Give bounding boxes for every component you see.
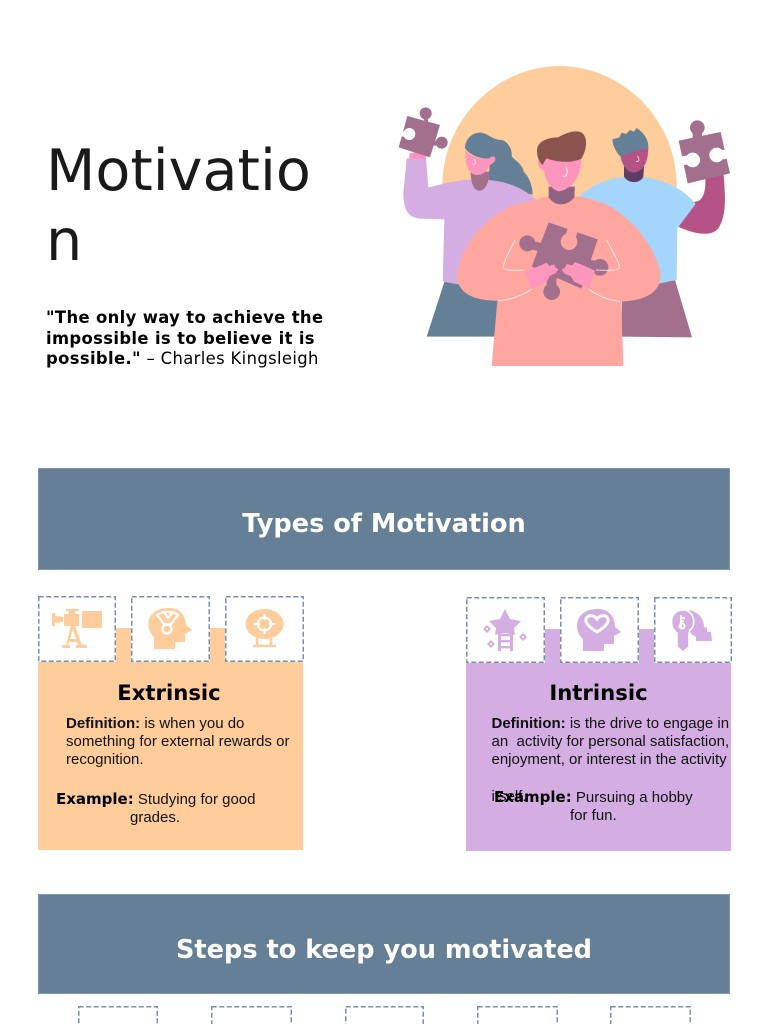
illustration: three people holding puzzle pieces xyxy=(398,66,730,366)
sleeve creases xyxy=(498,240,620,301)
intrinsic definition: enjoyment, or interest in the activity xyxy=(492,751,727,768)
intrinsic definition overflow: itself. xyxy=(492,788,527,805)
extrinsic example xyxy=(56,790,256,826)
extrinsic example: Example: Studying for good xyxy=(56,790,256,808)
quote: "The only way to achieve the xyxy=(46,308,323,327)
extrinsic definition xyxy=(66,715,290,768)
intrinsic example: Example: Pursuing a hobby xyxy=(494,788,693,806)
heading band: steps xyxy=(38,894,730,994)
icon box: camera on tripod xyxy=(38,596,116,662)
heading band: types of motivation: Types of Motivation xyxy=(242,509,526,539)
centre person xyxy=(457,131,661,366)
sun arch xyxy=(442,66,677,207)
icon box: head with medal xyxy=(131,596,210,662)
title: n xyxy=(46,208,82,274)
quote: impossible is to believe it is xyxy=(46,329,315,348)
step box 1 xyxy=(78,1006,158,1024)
extrinsic heading: Extrinsic xyxy=(117,680,221,705)
extrinsic example: grades. xyxy=(130,809,180,826)
icon box: star on ladder xyxy=(466,597,545,663)
quote: possible." – Charles Kingsleigh xyxy=(46,349,319,368)
step box 2 xyxy=(211,1006,292,1024)
heading band: steps: Steps to keep you motivated xyxy=(176,935,592,965)
quote xyxy=(46,308,323,368)
hands xyxy=(525,263,558,289)
extrinsic definition: Definition: is when you do xyxy=(66,715,244,732)
heading band: types of motivation xyxy=(38,468,730,570)
intrinsic definition: Definition: is the drive to engage in xyxy=(492,715,729,732)
extrinsic definition: something for external rewards or xyxy=(66,733,289,750)
intrinsic example xyxy=(494,788,693,824)
woman on left xyxy=(399,107,537,337)
puzzle piece right xyxy=(679,120,730,183)
panel: extrinsic xyxy=(38,628,303,850)
man on right xyxy=(579,120,730,337)
step box 4 xyxy=(477,1006,558,1024)
icon box: target on stand xyxy=(225,596,304,662)
title: Motivatio xyxy=(46,138,311,204)
icon box: head with heart xyxy=(560,597,639,663)
panel: intrinsic xyxy=(466,629,731,851)
extrinsic definition: recognition. xyxy=(66,751,144,768)
title xyxy=(46,138,311,274)
step box 3 xyxy=(345,1006,424,1024)
puzzle piece held xyxy=(519,222,608,300)
intrinsic example: for fun. xyxy=(570,807,617,824)
intrinsic heading: Intrinsic xyxy=(549,680,648,705)
intrinsic definition xyxy=(492,715,729,768)
step box 5 xyxy=(610,1006,691,1024)
puzzle piece left xyxy=(399,107,448,157)
intrinsic definition: an activity for personal satisfaction, xyxy=(492,733,729,750)
icon box: keys xyxy=(654,597,732,663)
